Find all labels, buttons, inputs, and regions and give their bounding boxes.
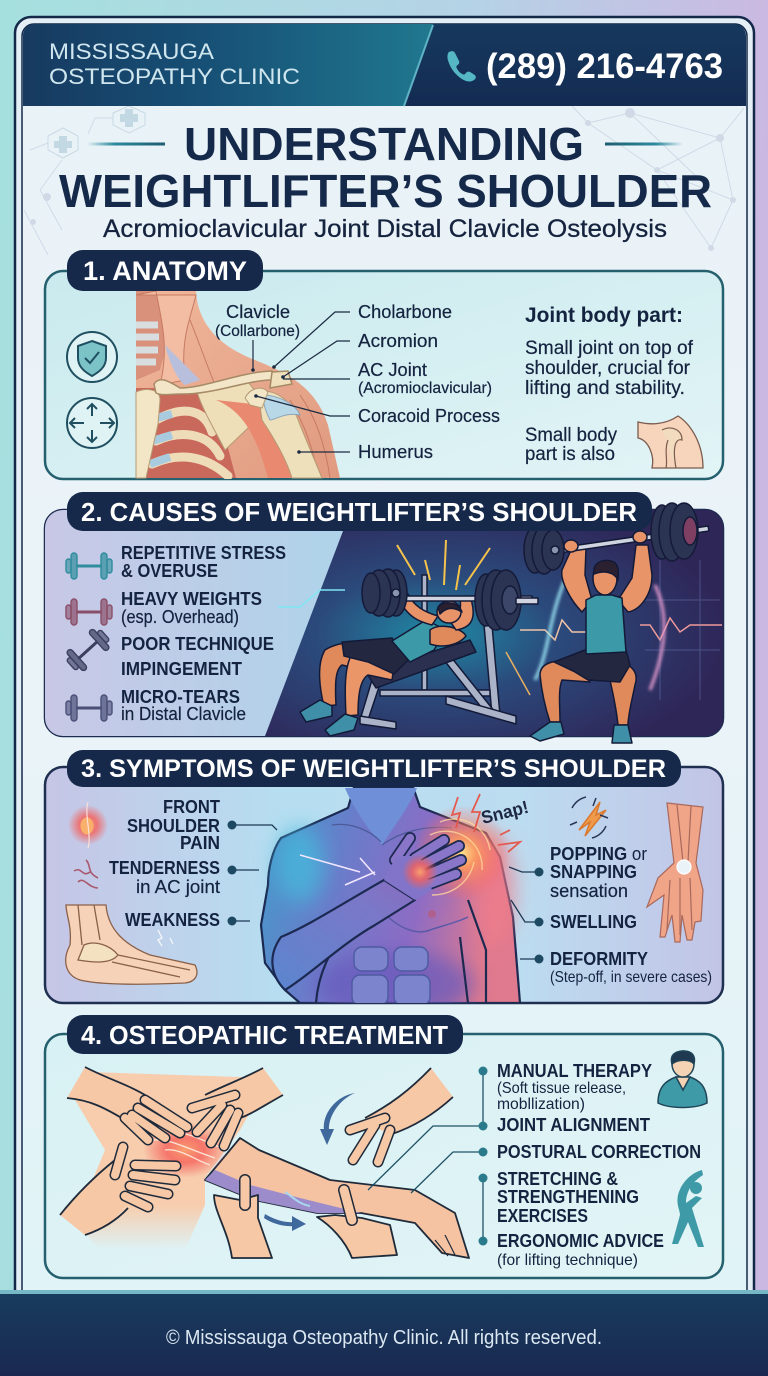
symptom labels right: SWELLING bbox=[550, 911, 637, 932]
anatomy labels: Coracoid Process bbox=[358, 406, 500, 426]
causes illustration background bbox=[45, 510, 725, 736]
anatomy side note: Joint body part: bbox=[525, 304, 683, 327]
body and arm bbox=[72, 1072, 270, 1250]
bench press barbell bbox=[400, 596, 532, 601]
treatment connectors bbox=[368, 1066, 488, 1246]
icon: dumbbell angled bbox=[62, 625, 114, 675]
title rule left bbox=[87, 142, 165, 146]
bench and rack bbox=[360, 575, 516, 729]
title block: WEIGHTLIFTER’S SHOULDER bbox=[59, 165, 712, 217]
lifter legs and shoes bbox=[320, 642, 392, 706]
anatomy labels: (Acromioclavicular) bbox=[358, 380, 492, 397]
symptom labels left: PAIN bbox=[180, 832, 220, 853]
causes list: POOR TECHNIQUE bbox=[121, 633, 274, 654]
athlete arms and torso bbox=[562, 548, 592, 612]
phone number: (289) 216-4763 bbox=[486, 47, 723, 86]
symptom labels right bbox=[550, 843, 712, 986]
symptom connectors bbox=[228, 820, 544, 964]
anatomy labels: Cholarbone bbox=[358, 302, 452, 322]
treatment list: STRETCHING & bbox=[497, 1168, 618, 1189]
causes list: in Distal Clavicle bbox=[121, 704, 246, 724]
section heading: anatomy bbox=[67, 250, 263, 291]
title: UNDERSTANDING bbox=[184, 118, 584, 170]
symptom labels right: sensation bbox=[550, 880, 628, 901]
anatomy side note: Small body bbox=[525, 425, 617, 446]
panel: causes bbox=[45, 492, 725, 743]
icon: dumbbell maroon bbox=[66, 599, 112, 625]
symptom labels left bbox=[109, 796, 221, 930]
treatment illustration bbox=[60, 1067, 469, 1258]
anatomy labels bbox=[215, 302, 500, 462]
anatomy labels: Clavicle bbox=[226, 302, 290, 322]
treatment list: (for lifting technique) bbox=[497, 1252, 638, 1269]
causes list bbox=[121, 542, 286, 724]
treatment list: EXERCISES bbox=[497, 1205, 588, 1226]
treatment list: JOINT ALIGNMENT bbox=[497, 1114, 651, 1135]
title block bbox=[59, 118, 712, 243]
anatomy leader lines bbox=[251, 312, 350, 454]
icon: stretching figure bbox=[672, 1170, 704, 1247]
athlete legs and shoes bbox=[540, 660, 590, 722]
illustration: wrist and hand bones bbox=[647, 803, 703, 942]
symptom labels left: SHOULDER bbox=[127, 815, 220, 836]
causes list: HEAVY WEIGHTS bbox=[121, 588, 262, 609]
symptom labels right: POPPING or bbox=[550, 843, 647, 864]
illustration: foot bones bbox=[66, 905, 197, 984]
icon: movement arrows bbox=[67, 398, 117, 448]
icon: dumbbell teal bbox=[66, 553, 112, 579]
anatomy side note: lifting and stability. bbox=[525, 378, 685, 399]
treatment list bbox=[497, 1060, 701, 1269]
snap burst: Snap! bbox=[479, 797, 531, 828]
title rule right bbox=[605, 142, 683, 146]
panel: treatment bbox=[45, 1015, 723, 1278]
anatomy side note: shoulder, crucial for bbox=[525, 358, 691, 379]
header teal panel bbox=[23, 24, 433, 106]
snap burst bbox=[452, 794, 531, 852]
section heading: symptoms: 3. SYMPTOMS OF WEIGHTLIFTER’S SHOULDER bbox=[81, 755, 666, 783]
icon: dumbbell slate bbox=[66, 695, 112, 721]
anatomy labels: Acromion bbox=[358, 331, 438, 351]
symptom labels left: in AC joint bbox=[136, 876, 220, 897]
icon: phone bbox=[447, 51, 476, 81]
anatomy labels: AC Joint bbox=[358, 360, 427, 380]
symptom labels left: TENDERNESS bbox=[109, 857, 220, 878]
anatomy labels: (Collarbone) bbox=[215, 323, 300, 340]
icon: snapping burst bbox=[570, 797, 608, 838]
forearm and wrist bbox=[272, 880, 415, 990]
hand top right bbox=[192, 1068, 283, 1146]
header band bbox=[23, 24, 746, 106]
icon: tenderness squiggles bbox=[74, 860, 98, 888]
lifter torso and arms bbox=[392, 620, 446, 662]
symptom labels right: DEFORMITY bbox=[550, 948, 649, 969]
footer band bbox=[0, 1290, 768, 1376]
causes list: & OVERUSE bbox=[121, 560, 218, 581]
causes list: MICRO-TEARS bbox=[121, 686, 240, 707]
background network decoration bbox=[24, 106, 744, 255]
symptom labels left: FRONT bbox=[163, 796, 221, 817]
clinic name: MISSISSAUGA bbox=[49, 39, 214, 64]
arrow: glide bbox=[264, 1214, 306, 1231]
causes list: IMPINGEMENT bbox=[121, 658, 243, 679]
small shoulder illustration bbox=[638, 416, 703, 468]
torso illustration bbox=[261, 787, 520, 1019]
section heading: causes: 2. CAUSES OF WEIGHTLIFTER’S SHOULDER bbox=[81, 497, 637, 527]
hand lower right bbox=[317, 1190, 397, 1258]
pain glow on shoulder bbox=[417, 807, 508, 897]
symptom labels left: WEAKNESS bbox=[125, 909, 220, 930]
panel: symptoms bbox=[45, 750, 723, 1019]
anatomy labels: Humerus bbox=[358, 442, 433, 462]
hand top left bbox=[67, 1067, 187, 1140]
copyright: © Mississauga Osteopathy Clinic. All rights reserved. bbox=[166, 1327, 602, 1349]
clinic name: OSTEOPATHY CLINIC bbox=[49, 64, 300, 89]
icon: pain glow bbox=[68, 802, 108, 848]
treatment list: STRENGTHENING bbox=[497, 1186, 639, 1207]
clinic name bbox=[49, 39, 300, 89]
arrow: curved rotation bbox=[320, 1093, 355, 1145]
panel: anatomy bbox=[45, 250, 723, 479]
overhead press athlete bbox=[524, 503, 709, 743]
overhead barbell bbox=[524, 526, 709, 558]
wrist detail bbox=[435, 1235, 455, 1256]
symptom labels right: SNAPPING bbox=[550, 861, 637, 882]
treatment list: mobllization) bbox=[497, 1096, 585, 1113]
section heading: anatomy: 1. ANATOMY bbox=[83, 256, 247, 286]
causes list: REPETITIVE STRESS bbox=[121, 542, 286, 563]
anatomy illustration bbox=[136, 291, 340, 478]
hand upper right bbox=[350, 1068, 453, 1162]
icon: shield bbox=[67, 332, 117, 382]
treatment list: POSTURAL CORRECTION bbox=[497, 1141, 701, 1162]
treatment list: (Soft tissue release, bbox=[497, 1080, 626, 1097]
anatomy side note: Small joint on top of bbox=[525, 338, 694, 359]
treatment list: MANUAL THERAPY bbox=[497, 1060, 653, 1081]
section heading: treatment: 4. OSTEOPATHIC TREATMENT bbox=[81, 1020, 448, 1050]
bench press athlete bbox=[300, 569, 538, 736]
athlete head bbox=[593, 561, 617, 595]
subtitle: Acromioclavicular Joint Distal Clavicle Osteolysis bbox=[103, 215, 667, 243]
hand left bbox=[60, 1147, 176, 1235]
hand on chest bbox=[395, 838, 461, 886]
treatment list: ERGONOMIC ADVICE bbox=[497, 1230, 664, 1251]
hand bottom centre bbox=[214, 1180, 272, 1258]
symptom labels right: (Step-off, in severe cases) bbox=[550, 969, 712, 986]
anatomy side note: part is also bbox=[525, 444, 615, 465]
icon: therapist bbox=[658, 1051, 707, 1108]
causes list: (esp. Overhead) bbox=[121, 607, 239, 627]
anatomy side note bbox=[525, 304, 694, 465]
